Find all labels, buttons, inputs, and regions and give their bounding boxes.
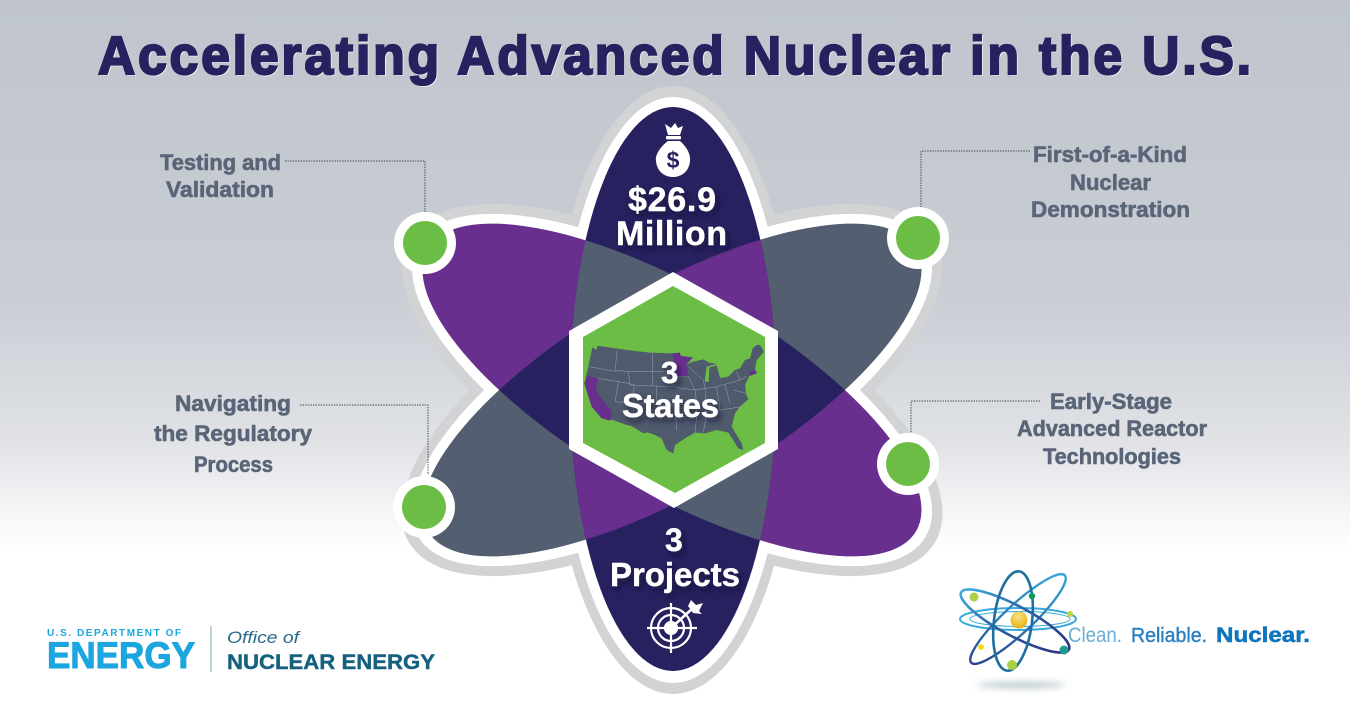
- label: first-of-a-kind: Demonstration: [1031, 197, 1190, 222]
- label: first-of-a-kind: First-of-a-Kind: [1033, 142, 1187, 167]
- logo: department of energy: NUCLEAR ENERGY: [227, 651, 435, 674]
- stat: projects: [610, 522, 740, 593]
- Connecticut: [749, 370, 756, 375]
- label: early-stage: Technologies: [1043, 444, 1181, 469]
- label: early-stage: Early-Stage: [1050, 389, 1172, 414]
- label: early-stage: [1017, 389, 1207, 469]
- logo shadow: [977, 682, 1065, 688]
- overlap: purple with slate orbit: [499, 334, 845, 492]
- logo tagline: Clean.: [1068, 624, 1122, 647]
- stat: funding: Million: [616, 215, 727, 253]
- label: testing and validation: Testing and: [160, 150, 281, 175]
- logo: department of energy: Office of: [227, 628, 302, 647]
- atom white ring: [362, 97, 982, 683]
- label: navigating the regulatory process: Navigating: [175, 391, 291, 416]
- country shape: [584, 345, 764, 453]
- stat: 3 states: [622, 355, 719, 424]
- logo electrons: [970, 592, 1073, 670]
- logo tagline: [1068, 624, 1310, 647]
- stat: projects: 3: [665, 522, 683, 558]
- stat: 3 states: States: [622, 387, 719, 424]
- icon: money bag: [656, 123, 690, 177]
- hexagon green fill: [583, 286, 765, 493]
- title: Accelerating Advanced Nuclear in the U.S.: [98, 26, 1254, 86]
- US map: [584, 345, 764, 453]
- label: navigating the regulatory process: [154, 391, 313, 477]
- label: early-stage: Advanced Reactor: [1017, 416, 1207, 441]
- logo nucleus: [1010, 612, 1028, 628]
- atom diagram: [402, 86, 942, 694]
- orbit: navy: [570, 107, 776, 671]
- overlap: navy with slate orbit: [572, 240, 774, 540]
- central hexagon: [569, 272, 778, 508]
- node: top right: [887, 207, 949, 269]
- orbit: purple: [377, 161, 967, 619]
- logo: department of energy: U.S. DEPARTMENT OF: [47, 628, 181, 639]
- atom outer ring: [347, 86, 997, 694]
- label: first-of-a-kind: Nuclear: [1070, 170, 1151, 195]
- node: top left: [394, 212, 456, 274]
- label: navigating the regulatory process: the Regulatory: [154, 421, 313, 446]
- stat: projects: Projects: [610, 556, 740, 593]
- node: bottom left: [393, 476, 455, 538]
- logo atom: [954, 565, 1076, 673]
- label: testing and validation: Validation: [166, 177, 274, 202]
- leader line: early stage: [911, 401, 1040, 433]
- logo: department of energy: ENERGY: [47, 635, 195, 676]
- logo: clean reliable nuclear: [954, 565, 1310, 688]
- California: [584, 376, 612, 421]
- icon: money bag: $: [667, 147, 680, 173]
- Minnesota: [673, 353, 693, 376]
- leader line: first of a kind: [921, 151, 1030, 207]
- label: first-of-a-kind: [1031, 142, 1190, 222]
- stat: 3 states: 3: [661, 355, 678, 390]
- overlap: navy with purple orbit: [572, 240, 774, 540]
- logo tagline: Nuclear.: [1216, 624, 1310, 647]
- orbit: slate: [377, 161, 967, 619]
- icon: target: [647, 600, 703, 653]
- label: testing and validation: [160, 150, 281, 202]
- node: bottom right: [877, 433, 939, 495]
- leader line: regulatory: [300, 405, 428, 475]
- stat: funding: [616, 181, 727, 253]
- hexagon white border: [569, 272, 778, 508]
- leader line: testing: [285, 161, 425, 212]
- label: navigating the regulatory process: Process: [194, 452, 273, 477]
- state lines: [589, 350, 747, 433]
- logo tagline: Reliable.: [1131, 625, 1207, 647]
- stat: funding: $26.9: [628, 181, 716, 219]
- logo: department of energy: [47, 626, 435, 676]
